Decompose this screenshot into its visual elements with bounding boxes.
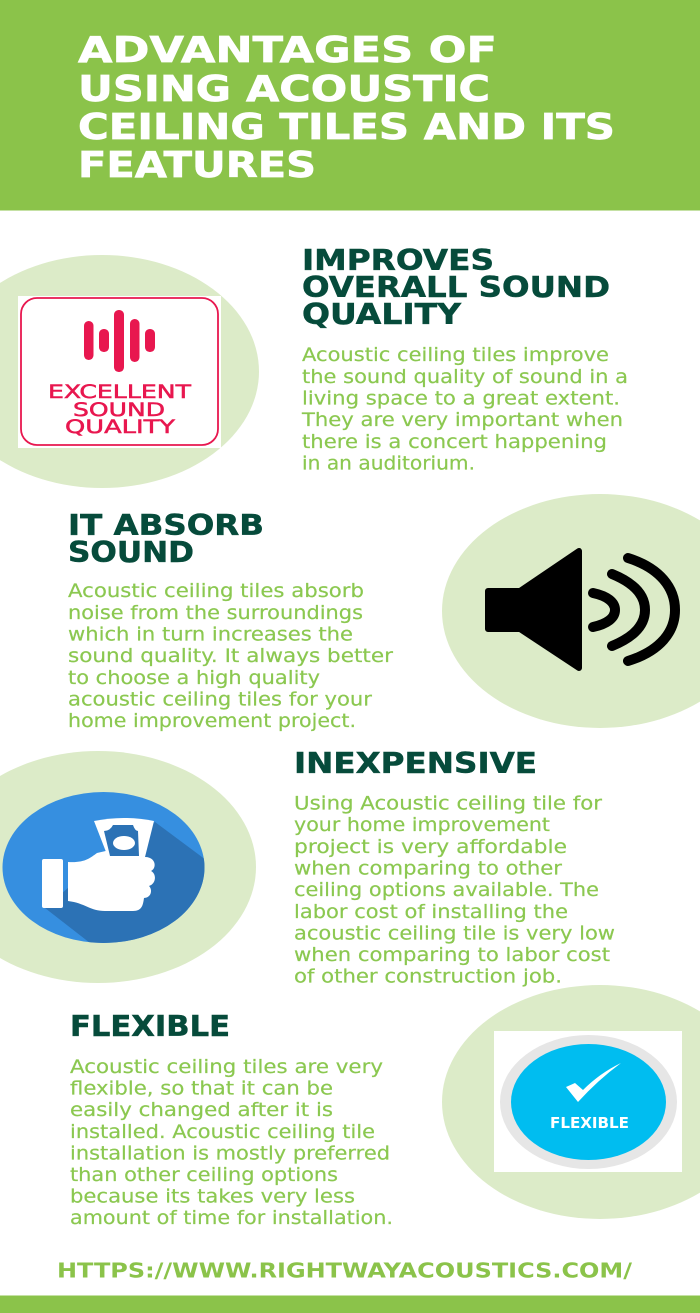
heading: improves overall sound quality: QUALITY (302, 298, 461, 331)
text block: inexpensive: Using Acoustic ceiling tile for (294, 792, 602, 814)
text block: flexible: than other ceiling options (70, 1164, 338, 1186)
heading: it absorb sound: SOUND (68, 536, 194, 569)
panel: sound quality ellipse (0, 255, 259, 488)
text block: flexible (70, 1056, 393, 1229)
text block: inexpensive: when comparing to labor cost (294, 944, 610, 966)
icon: flexible badge: FLEXIBLE (550, 1114, 629, 1132)
text block: absorb sound: home improvement project. (68, 710, 356, 732)
text block: inexpensive: ceiling options available. The (294, 879, 599, 901)
text block: sound quality: the sound quality of sound in a (302, 366, 628, 388)
text block: inexpensive: your home improvement (294, 814, 550, 836)
title (78, 30, 615, 186)
website url: HTTPS://WWW.RIGHTWAYACOUSTICS.COM/ (57, 1258, 633, 1282)
heading: improves overall sound quality: OVERALL SOUND (302, 271, 610, 304)
text block: absorb sound: noise from the surroundings (68, 602, 363, 624)
title: ADVANTAGES OF (78, 30, 497, 71)
text block: sound quality: there is a concert happening (302, 431, 607, 453)
text block: absorb sound: to choose a high quality (68, 667, 320, 689)
heading: improves overall sound quality: IMPROVES (302, 244, 494, 277)
text block: flexible: installed. Acoustic ceiling tile (70, 1121, 375, 1143)
text block: sound quality (301, 344, 628, 474)
text block: sound quality: Acoustic ceiling tiles improve (302, 344, 609, 366)
icon: flexible badge (494, 1031, 682, 1172)
text block: inexpensive: project is very affordable (294, 836, 567, 858)
heading: it absorb sound: IT ABSORB (68, 509, 264, 542)
text block: flexible: installation is mostly preferred (70, 1142, 390, 1164)
panel: flexible ellipse (442, 985, 700, 1219)
text block: inexpensive (294, 792, 615, 988)
text block: sound quality: They are very important when (301, 409, 623, 431)
text block: flexible: easily changed after it is (70, 1099, 333, 1121)
text block: inexpensive: labor cost of installing the (294, 901, 568, 923)
icon: excellent sound quality badge: SOUND (73, 400, 165, 421)
heading: inexpensive: INEXPENSIVE (294, 747, 537, 780)
text block: absorb sound: acoustic ceiling tiles for your (68, 688, 372, 710)
text block: flexible: Acoustic ceiling tiles are very (70, 1056, 383, 1078)
title: FEATURES (78, 145, 316, 186)
heading: it absorb sound (68, 509, 264, 569)
panel: inexpensive ellipse (0, 751, 256, 983)
footer band (0, 1296, 700, 1313)
icon: excellent sound quality badge (18, 296, 221, 448)
title: USING ACOUSTIC (78, 69, 490, 110)
text block: absorb sound: sound quality. It always better (68, 645, 393, 667)
heading: flexible: FLEXIBLE (70, 1010, 230, 1043)
text block: inexpensive: when comparing to other (294, 858, 562, 880)
icon: excellent sound quality badge: QUALITY (65, 417, 176, 438)
text block: sound quality: living space to a great extent. (302, 388, 620, 410)
text block: sound quality: in an auditorium. (302, 452, 475, 474)
text block: inexpensive: of other construction job. (294, 966, 562, 988)
panel: absorb ellipse (442, 494, 700, 728)
text block: flexible: amount of time for installation. (70, 1207, 393, 1229)
text block: absorb sound (68, 580, 393, 732)
heading: improves overall sound quality (302, 244, 610, 331)
title: CEILING TILES AND ITS (78, 107, 615, 148)
icon: excellent sound quality badge: EXCELLENT (48, 382, 192, 403)
icon: hand holding money (2, 792, 206, 950)
text block: absorb sound: Acoustic ceiling tiles absorb (68, 580, 364, 602)
header band (0, 0, 700, 210)
icon: speaker (488, 551, 675, 668)
text block: absorb sound: which in turn increases the (68, 624, 353, 646)
text block: flexible: because its takes very less (70, 1186, 355, 1208)
text block: flexible: flexible, so that it can be (70, 1078, 333, 1100)
text block: inexpensive: acoustic ceiling tile is very low (294, 922, 615, 944)
